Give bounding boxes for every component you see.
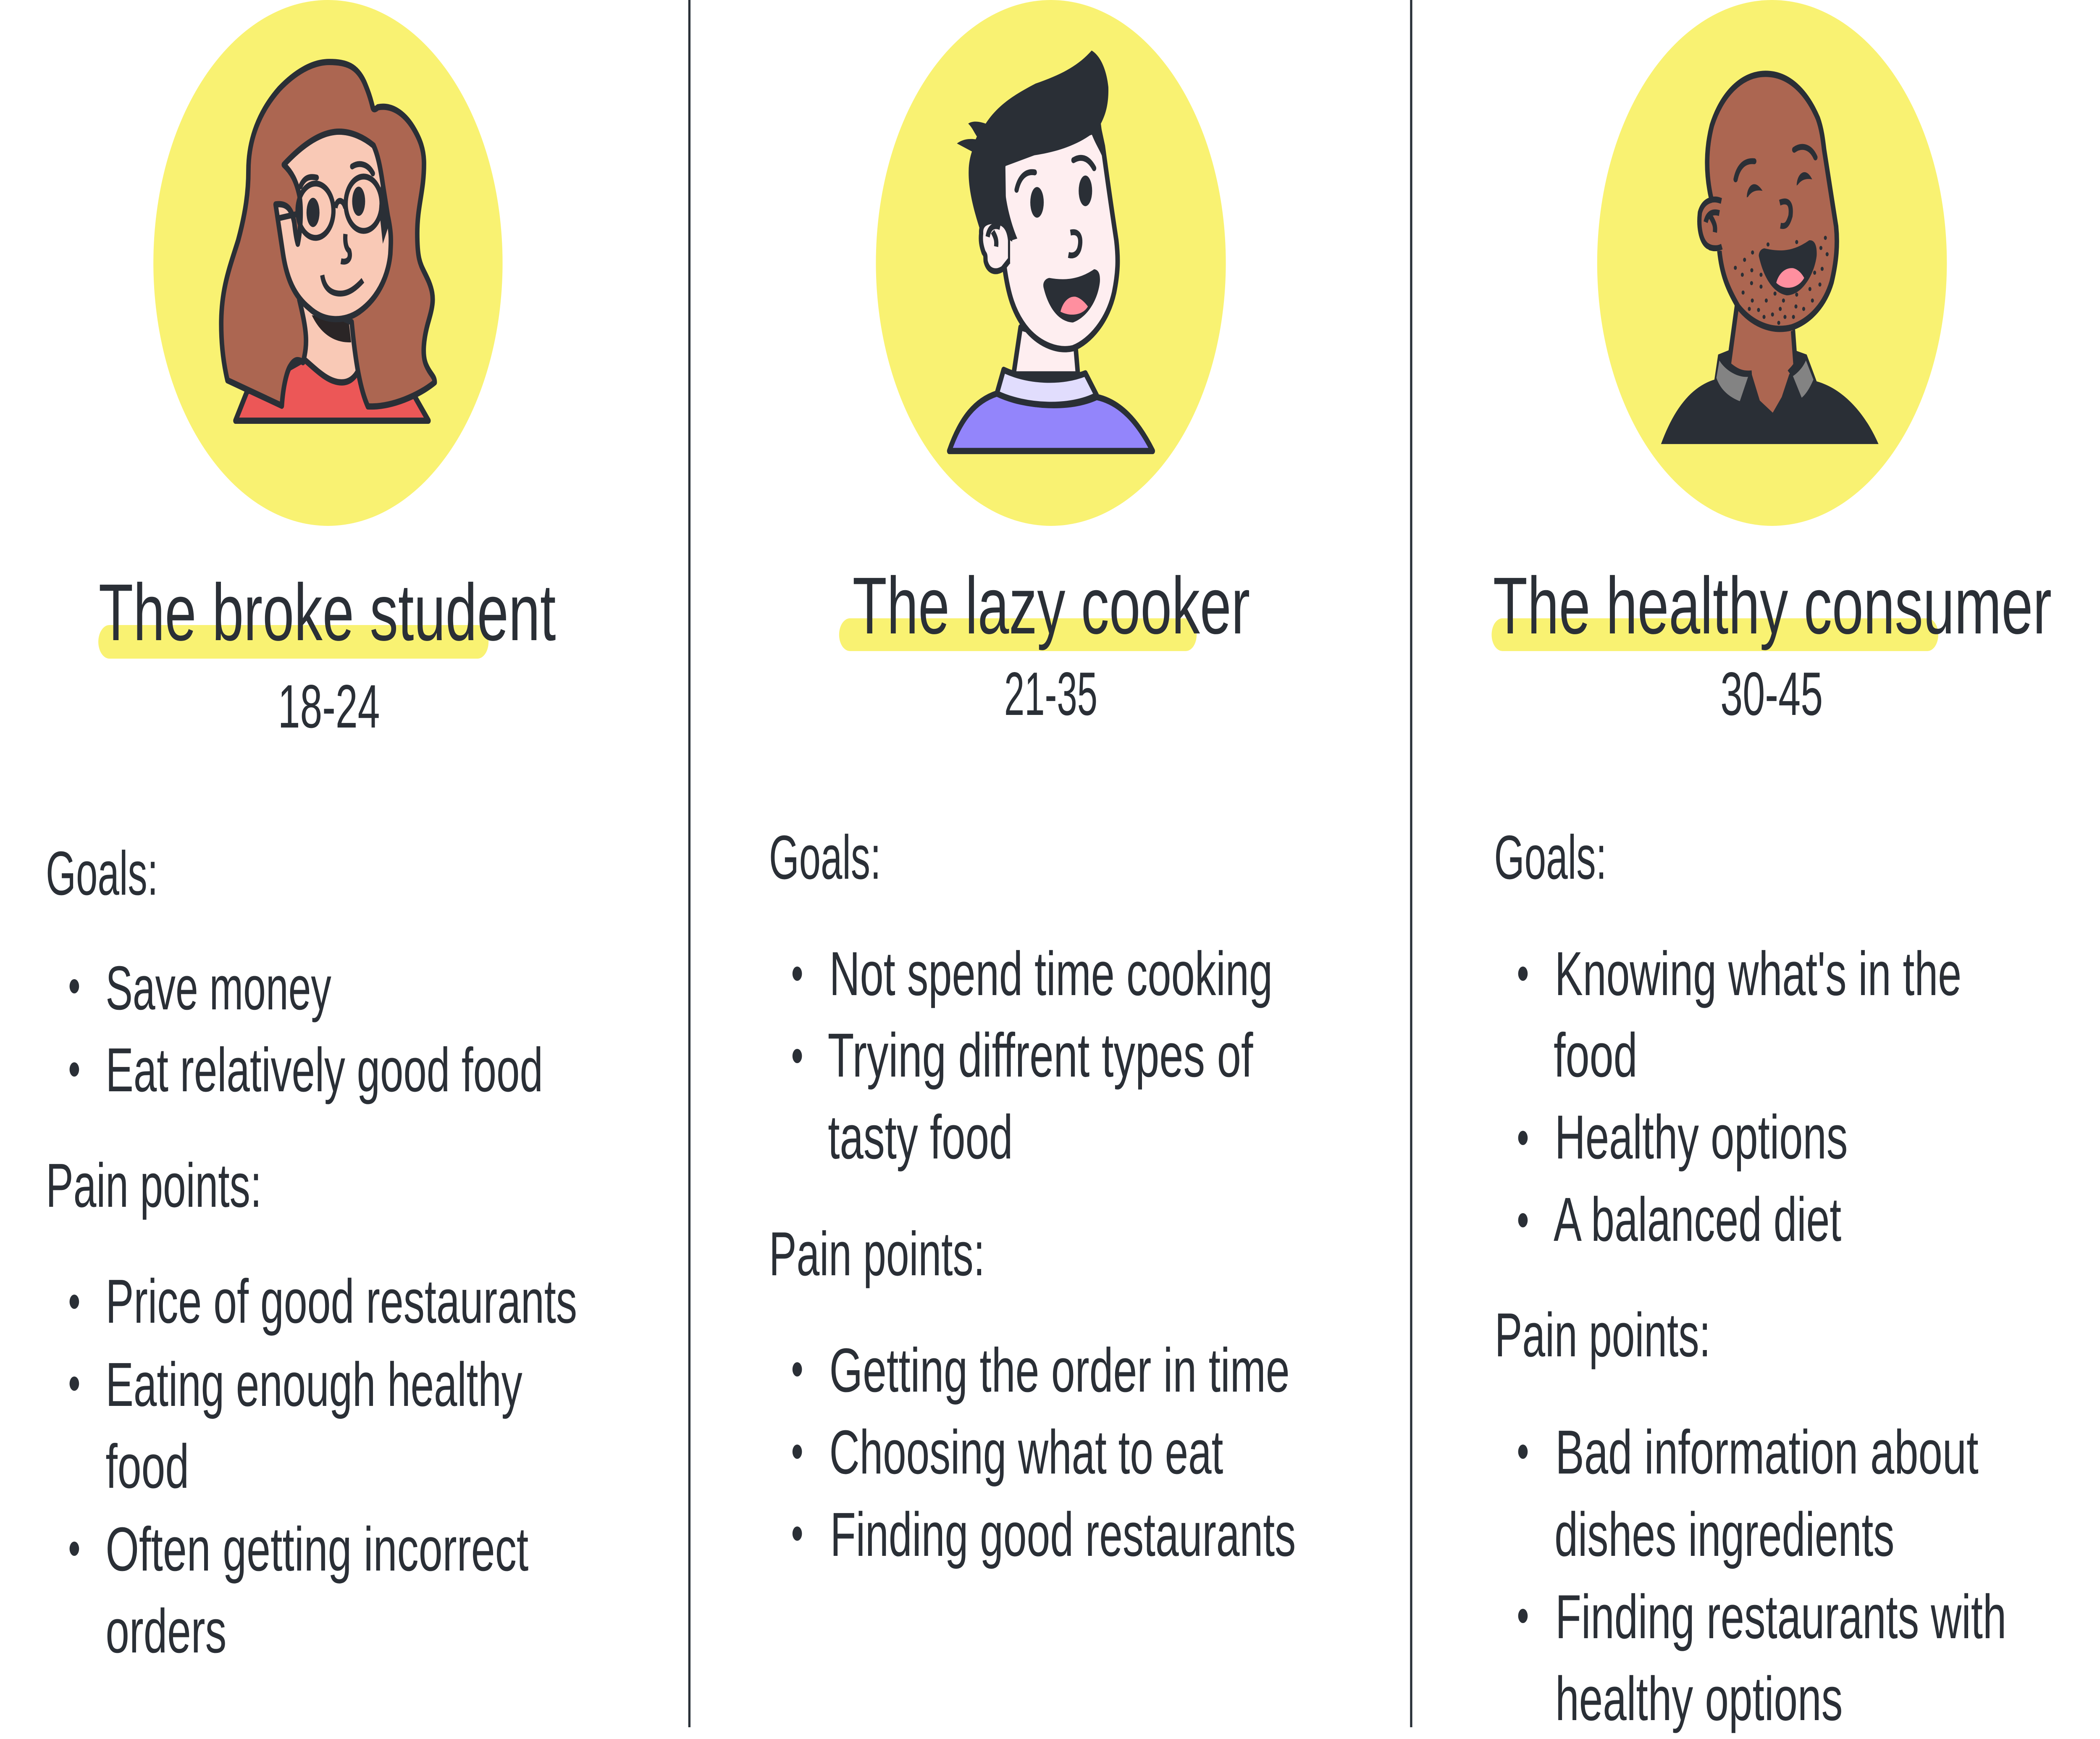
age range: 30-45 [1720,660,1823,728]
pain points heading: Pain points: [769,1219,985,1289]
pain points list: orders [105,1596,226,1666]
pain points list: food [105,1432,189,1501]
pain points list: Finding good restaurants [830,1500,1296,1569]
pain points list [793,1335,1296,1569]
panel: the lazy cooker [769,0,1296,1569]
goals list: Knowing what's in the [1555,939,1961,1009]
icon: avatar of bald bearded man [1597,0,1947,526]
goals list: Eat relatively good food [105,1035,543,1105]
goals list: tasty food [828,1102,1013,1172]
goals list [793,939,1273,1172]
goals list: Healthy options [1555,1102,1848,1172]
heading: The broke student: The broke student [99,567,556,657]
goals heading: Goals: [769,822,881,892]
age range: 21-35 [1004,660,1097,728]
pain points list: Eating enough healthy [105,1350,522,1419]
pain points heading: Pain points: [46,1151,262,1220]
goals list [1518,939,1961,1254]
icon: avatar of woman with glasses [153,0,503,526]
panel: the healthy consumer [1491,0,2052,1734]
pain points list: Finding restaurants with [1555,1582,2006,1652]
pain points list: dishes ingredients [1554,1500,1895,1569]
heading: The lazy cooker: The lazy cooker [853,560,1250,651]
icon: avatar of man with quiff [876,0,1226,526]
pain points heading: Pain points: [1495,1300,1711,1370]
pain points list: Bad information about [1555,1417,1979,1487]
goals list [70,953,543,1105]
goals heading: Goals: [46,838,158,908]
goals list: Trying diffrent types of [828,1020,1253,1090]
goals heading: Goals: [1494,822,1606,892]
pain points list: Choosing what to eat [830,1417,1223,1487]
pain points list: healthy options [1555,1664,1843,1734]
goals list: A balanced diet [1554,1185,1841,1254]
heading: The healthy consumer: The healthy consumer [1493,560,2052,651]
age range: 18-24 [278,672,380,741]
pain points list [70,1266,577,1666]
pain points list: Often getting incorrect [105,1514,528,1584]
goals list: Save money [105,953,331,1023]
pain points list: Price of good restaurants [105,1266,577,1336]
panel: the broke student [46,0,577,1666]
goals list: Not spend time cooking [830,939,1273,1009]
pain points list [1518,1417,2006,1734]
pain points list: Getting the order in time [830,1335,1290,1405]
goals list: food [1554,1020,1638,1090]
